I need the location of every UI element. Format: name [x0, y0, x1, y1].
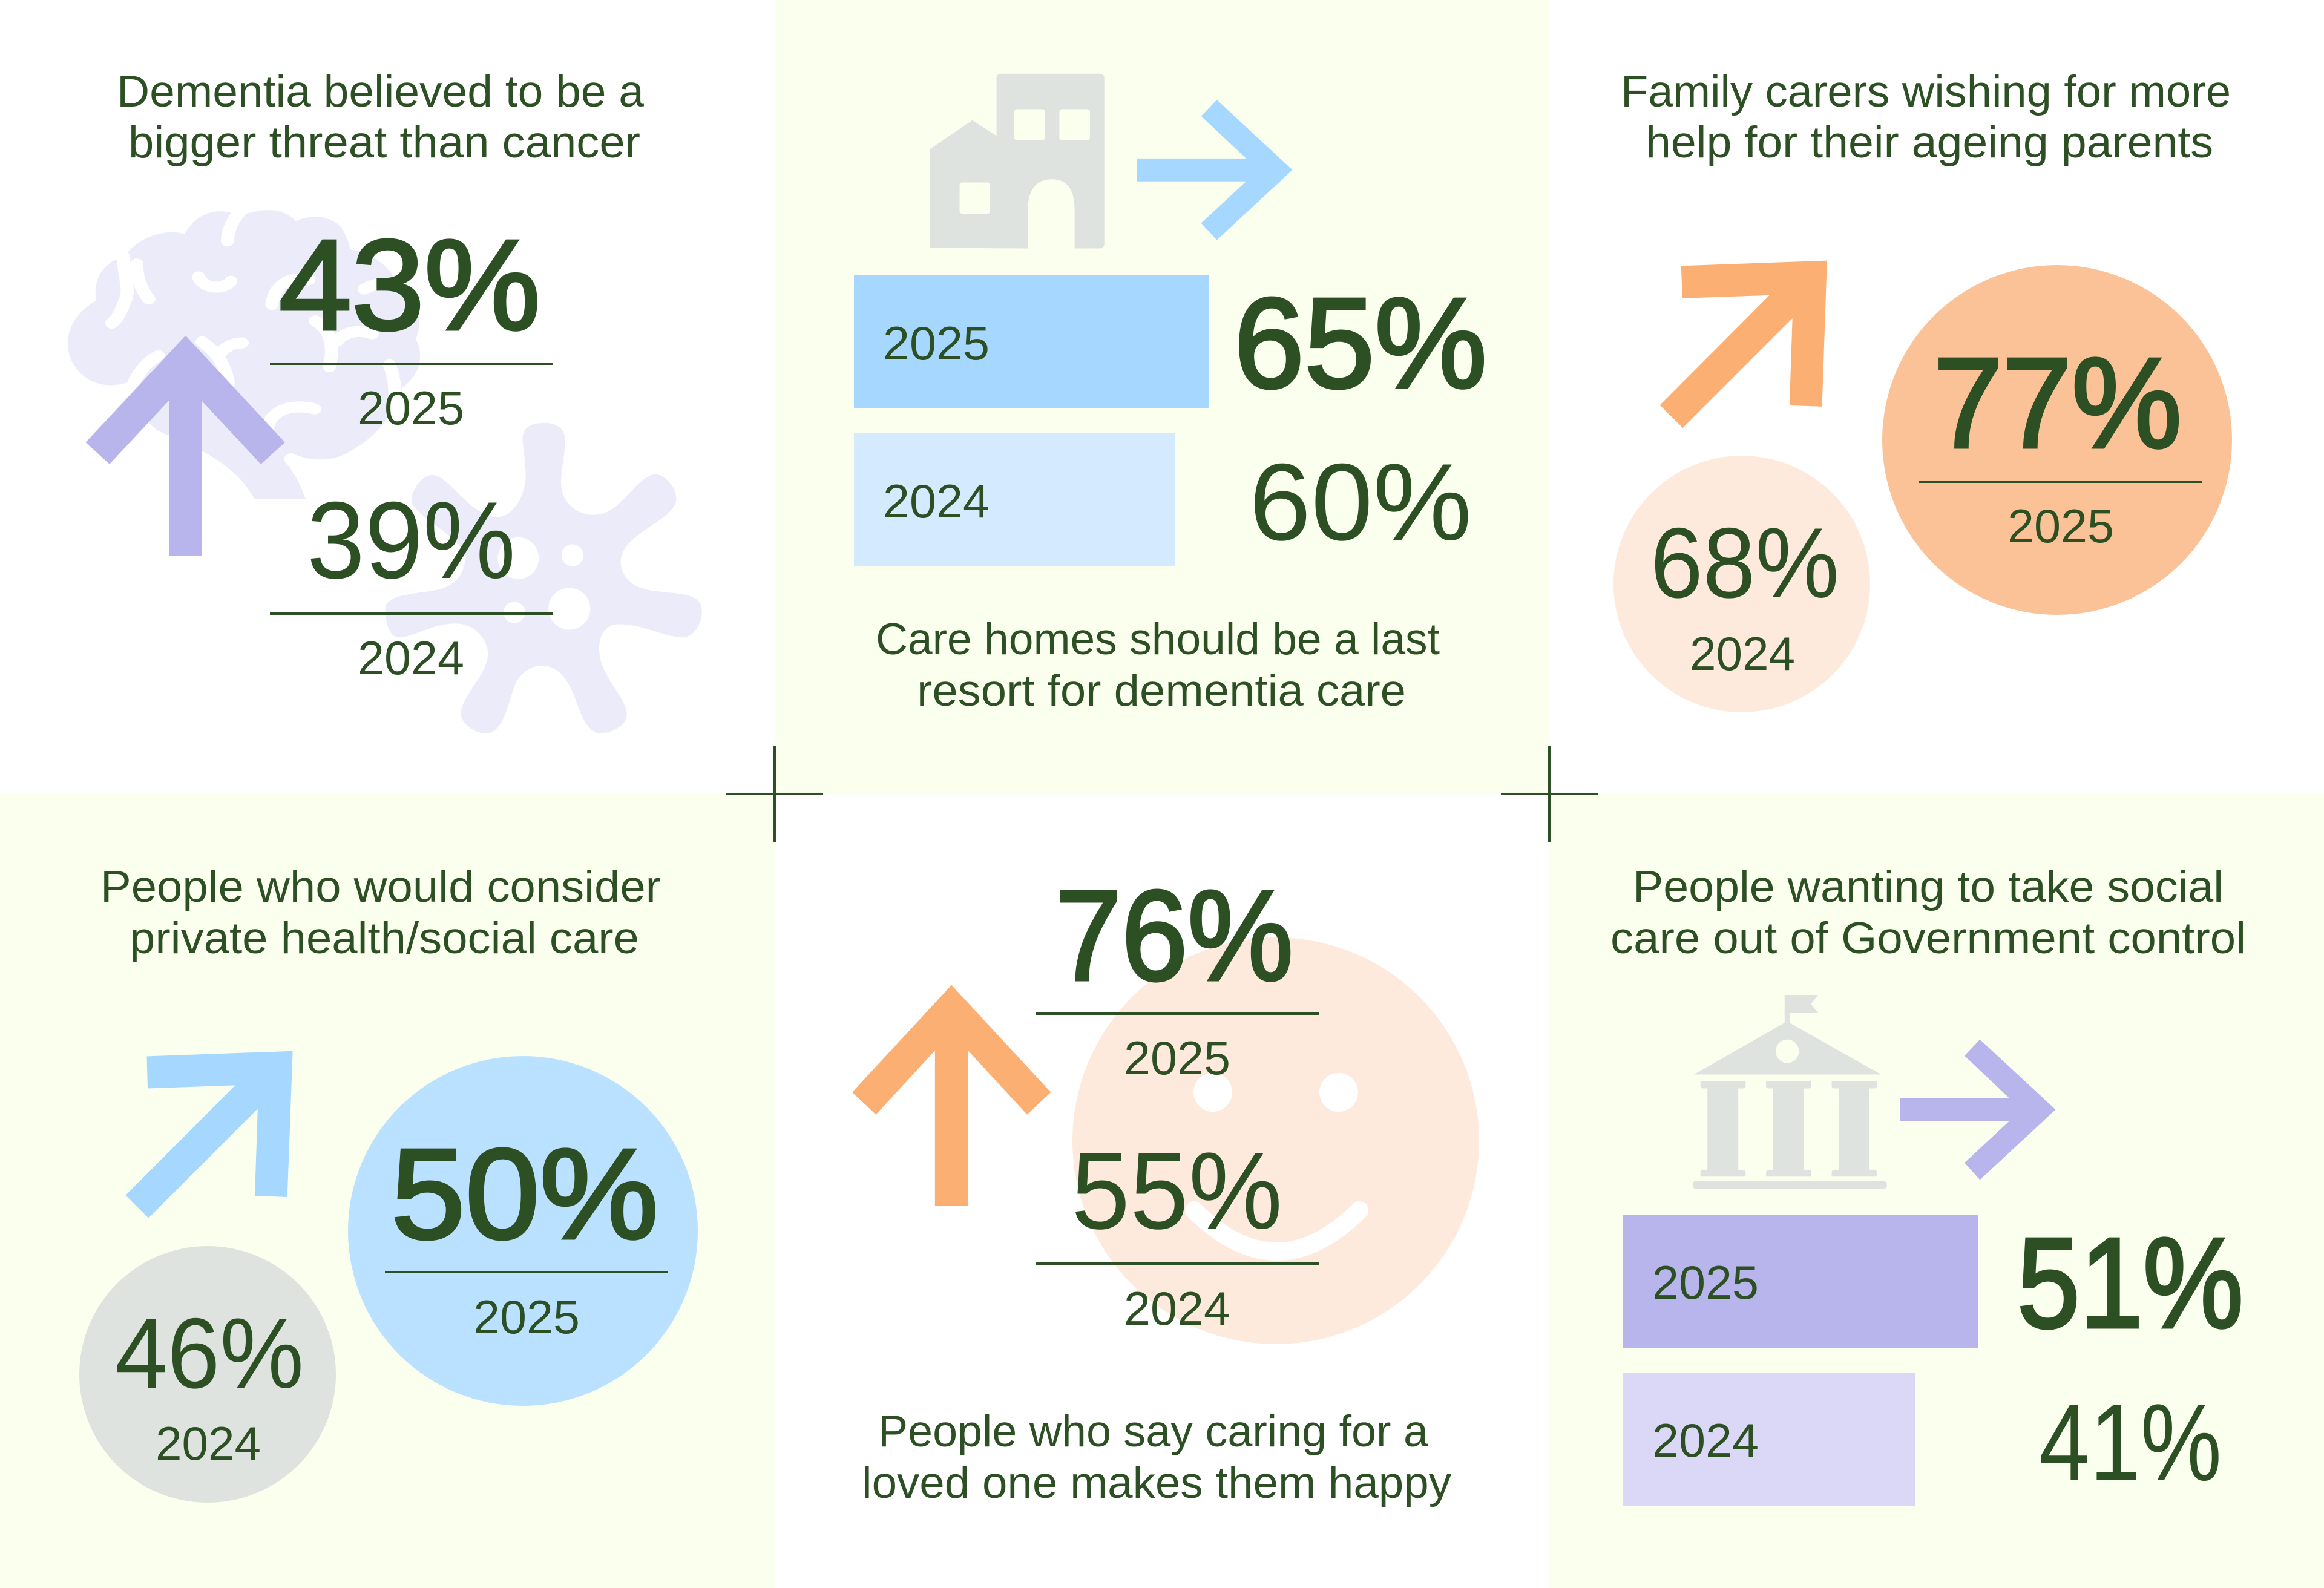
title: care homes: Care homes should be a last	[876, 615, 1440, 664]
stat: 43% 2025	[270, 213, 553, 435]
title: care homes	[876, 615, 1440, 715]
bar: 2024	[854, 433, 1175, 566]
circle: 2024 stat: 2024	[156, 1417, 261, 1470]
bar: 2024	[1623, 1373, 1915, 1506]
stat: 55% 2024: 2024	[1124, 1282, 1230, 1335]
title: private care	[100, 862, 661, 963]
stat: 76% 2025: 2025	[1124, 1031, 1230, 1084]
bar: 2025: 2025	[883, 317, 990, 370]
title: family carers	[1621, 67, 2231, 167]
panel: care homes	[775, 0, 1549, 794]
circle: 2024 stat	[79, 1246, 336, 1503]
arrow: up orange	[852, 985, 1051, 1206]
circle: 2025 stat: 2025	[2007, 499, 2114, 553]
icon: brain	[68, 210, 420, 499]
title: family carers: Family carers wishing for more	[1621, 67, 2231, 116]
bar: 2024: 2024	[883, 474, 990, 528]
title: dementia threat: Dementia believed to be a	[117, 67, 644, 116]
stat: 76% 2025: 76%	[1055, 864, 1293, 1007]
title: caring makes happy	[862, 1407, 1452, 1508]
circle: 2024 stat: 46%	[115, 1298, 304, 1409]
title: care homes: resort for dementia care	[917, 666, 1406, 715]
circle: 2025 stat: 2025	[473, 1290, 580, 1344]
arrow: diagonal blue	[125, 1051, 293, 1218]
stat: 76% 2025	[1036, 864, 1319, 1084]
title: government control	[1610, 862, 2246, 963]
title: private care: People who would consider	[100, 862, 661, 911]
arrow: diagonal orange	[1660, 261, 1827, 428]
stat: 55% 2024: 55%	[1071, 1130, 1282, 1252]
bar: 2025: 2025	[1652, 1256, 1759, 1309]
circle: 2024 stat: 2024	[1690, 627, 1795, 680]
cross marker: left	[726, 746, 823, 842]
icon: smiley face	[1072, 937, 1479, 1344]
icon: care home building	[930, 74, 1105, 249]
stat: 43% 2025: 2025	[358, 381, 464, 435]
circle: 2024 stat: 68%	[1650, 507, 1839, 618]
stat: 41%: 41%	[2039, 1382, 2222, 1504]
arrow: right purple	[1900, 1040, 2055, 1180]
panel: family carers	[1549, 0, 2324, 794]
icon: cancer cell	[386, 423, 702, 733]
panel: government control	[1549, 794, 2324, 1588]
title: government control: People wanting to take social	[1633, 862, 2224, 911]
panel: dementia vs cancer	[0, 0, 775, 794]
title: private care: private health/social care	[130, 914, 639, 963]
cross marker: right	[1501, 746, 1598, 842]
bar: 2025	[854, 275, 1209, 408]
title: caring makes happy: People who say caring for a	[878, 1407, 1428, 1456]
panel: private care	[0, 794, 775, 1588]
icon: government building	[1693, 995, 1887, 1189]
stat: 60%: 60%	[1249, 441, 1472, 563]
arrow: right blue	[1137, 100, 1293, 240]
title: government control: care out of Government control	[1610, 914, 2246, 963]
title: caring makes happy: loved one makes them happy	[862, 1458, 1452, 1508]
circle: 2025 stat: 50%	[391, 1122, 658, 1265]
circle: 2025 stat	[1882, 265, 2232, 615]
circle: 2025 stat	[348, 1056, 698, 1406]
panel: caring makes happy	[775, 794, 1549, 1588]
title: family carers: help for their ageing parents	[1646, 118, 2213, 167]
bar: 2024: 2024	[1652, 1414, 1759, 1467]
circle: 2024 stat	[1613, 456, 1870, 712]
arrow: up purple	[86, 335, 285, 556]
stat: 65%: 65%	[1234, 271, 1487, 415]
title: dementia threat: bigger threat than cancer	[128, 118, 640, 167]
stat: 43% 2025: 43%	[279, 213, 540, 356]
stat: 39% 2024: 39%	[307, 479, 516, 602]
title: dementia threat	[117, 67, 644, 167]
stat: 51%: 51%	[2017, 1211, 2244, 1354]
stat: 39% 2024	[270, 479, 553, 684]
stat: 55% 2024	[1036, 1130, 1319, 1335]
bar: 2025	[1623, 1215, 1978, 1348]
circle: 2025 stat: 77%	[1934, 331, 2182, 474]
stat: 39% 2024: 2024	[358, 631, 464, 684]
